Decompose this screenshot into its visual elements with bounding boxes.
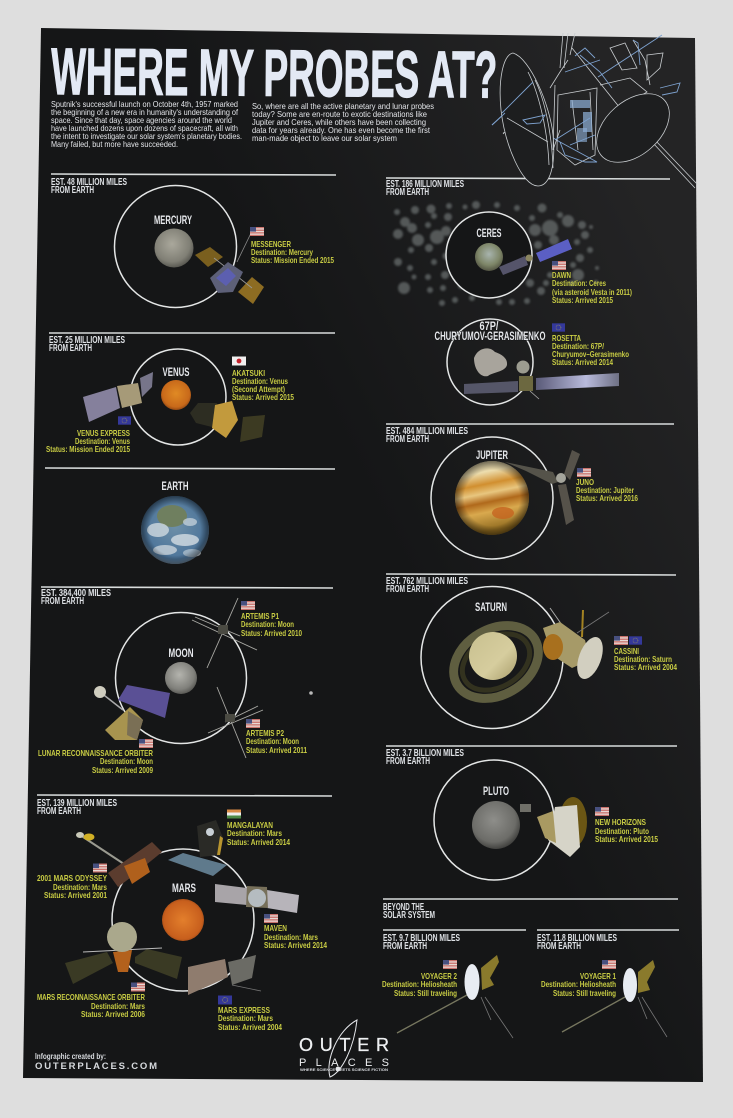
planet: Jupiter (455, 461, 529, 535)
caption: Akatsuki: Status: Arrived 2015 (232, 393, 294, 402)
caption: Mangalayan: MANGALAYAN (227, 821, 273, 830)
panel: Beyond the solar system (382, 901, 667, 1038)
panel: Jupiter (386, 425, 638, 559)
caption: Mars Reconnaissance Orbiter: Status: Arrived 2006 (81, 1010, 145, 1019)
intro text left (51, 100, 242, 149)
label: Mercury: MERCURY (154, 213, 192, 227)
panel: Pluto (386, 747, 658, 880)
caption: Akatsuki: Destination: Venus (232, 377, 288, 386)
flag: EU (118, 416, 131, 425)
caption: Messenger (251, 240, 334, 265)
heading: Mars distance: FROM EARTH (37, 805, 81, 817)
flag: EU (218, 996, 232, 1004)
caption: Akatsuki: AKATSUKI (232, 369, 265, 378)
caption: Rosetta: ROSETTA (552, 334, 581, 343)
caption: Lunar Reconnaissance Orbiter: LUNAR RECONNAISSANCE ORBITER (38, 749, 153, 758)
caption: Artemis P2: Status: Arrived 2011 (246, 746, 307, 755)
caption: Rosetta (552, 334, 629, 367)
caption: Rosetta: Destination: 67P/ (552, 342, 605, 351)
caption: Lunar Reconnaissance Orbiter (38, 749, 153, 775)
intro text right: today? Some are en-route to exotic destinations like (252, 110, 427, 119)
logo: Outer Places (299, 1020, 389, 1077)
caption: Mars Reconnaissance Orbiter: MARS RECONNAISSANCE ORBITER (37, 993, 145, 1002)
orbit ring (116, 612, 246, 744)
caption: Artemis P1: ARTEMIS P1 (241, 612, 279, 621)
asteroid field (393, 201, 599, 306)
probe: 2001 Mars Odyssey (76, 832, 162, 887)
caption: Artemis P1: Status: Arrived 2010 (241, 629, 302, 638)
label: comet name: CHURYUMOV-GERASIMENKO (434, 329, 546, 343)
heading: Jupiter distance: EST. 484 MILLION MILES (386, 425, 468, 437)
label: Pluto: PLUTO (483, 784, 509, 798)
panel: Mars (37, 797, 327, 1032)
panel: Earth (141, 479, 209, 564)
label: comet name (434, 319, 546, 343)
probe: Maven (215, 884, 299, 913)
probe: Artemis P1 (192, 598, 257, 668)
caption: Maven: Destination: Mars (264, 933, 318, 942)
probe: Messenger (195, 229, 264, 304)
flag: USA (443, 960, 457, 969)
logo: Outer Places: PLACES (299, 1057, 389, 1069)
caption: 2001 Mars Odyssey: Status: Arrived 2001 (44, 891, 107, 900)
flag: India (227, 810, 241, 818)
heading: Saturn distance: FROM EARTH (386, 583, 429, 595)
caption: New Horizons (595, 818, 658, 844)
probe: Voyager 1 (562, 960, 667, 1037)
heading: Pluto distance: FROM EARTH (386, 755, 430, 767)
section rules (37, 174, 679, 930)
probe: Rosetta (464, 360, 619, 399)
heading: Ceres distance (386, 178, 464, 198)
caption: Voyager 2: VOYAGER 2 (421, 972, 457, 981)
flag: USA (250, 227, 264, 236)
heading: Pluto distance: EST. 3.7 BILLION MILES (386, 747, 464, 759)
planet: Pluto (472, 801, 520, 849)
heading: Saturn distance: EST. 762 MILLION MILES (386, 575, 468, 587)
caption: 2001 Mars Odyssey (37, 874, 107, 900)
caption: Dawn (552, 271, 632, 305)
heading: Voyager 2 distance: EST. 9.7 BILLION MILES (383, 932, 460, 944)
panel: Ceres (386, 178, 632, 306)
heading: Voyager 1 distance: EST. 11.8 BILLION MILES (537, 932, 617, 944)
caption: Mars Reconnaissance Orbiter (37, 993, 145, 1019)
panel: Venus (46, 334, 294, 454)
caption: Voyager 1 (541, 972, 616, 998)
caption: Juno (576, 478, 638, 503)
footer credit (35, 1052, 157, 1072)
caption: New Horizons: NEW HORIZONS (595, 818, 646, 827)
caption: Voyager 2: Destination: Heliosheath (382, 980, 457, 989)
heading: Ceres distance: FROM EARTH (386, 186, 429, 198)
caption: Dawn: DAWN (552, 271, 571, 280)
label: comet name: 67P/ (480, 319, 499, 333)
probe: Akatsuki (190, 401, 265, 442)
planet: Moon (165, 662, 197, 694)
probe: Artemis P2 (208, 687, 263, 758)
orbit ring (434, 760, 554, 880)
caption: Lunar Reconnaissance Orbiter: Destination: Moon (100, 757, 153, 766)
planet: Venus (161, 380, 191, 410)
caption: Mars Express (218, 1006, 282, 1032)
intro text right: Jupiter and Ceres, while others have been collecting (252, 118, 426, 127)
caption: Venus Express (46, 429, 130, 454)
caption: Juno: Status: Arrived 2016 (576, 494, 638, 503)
flag: EU (629, 636, 642, 645)
label: Mars: MARS (172, 881, 196, 895)
heading: Voyager 2 distance (383, 932, 460, 952)
label: Moon: MOON (168, 646, 194, 660)
flag: USA (139, 739, 153, 748)
caption: Dawn: (via asteroid Vesta in 2011) (552, 288, 632, 297)
caption: Artemis P1 (241, 612, 302, 638)
footer credit: Infographic created by: (35, 1052, 106, 1061)
intro text right: data for years already. One has even become the first (252, 126, 431, 135)
heading: Ceres distance: EST. 186 MILLION MILES (386, 178, 464, 190)
heading: Venus distance: FROM EARTH (49, 342, 92, 354)
flag: EU (552, 323, 565, 332)
panel: 67P comet (434, 319, 629, 405)
caption: New Horizons: Status: Arrived 2015 (595, 835, 658, 844)
caption: Messenger: Destination: Mercury (251, 248, 313, 257)
footer credit: OUTERPLACES.COM (35, 1061, 157, 1072)
heading: Voyager 1 distance (537, 932, 617, 952)
heading: Jupiter distance (386, 425, 468, 445)
small speck (309, 691, 313, 695)
caption: Maven: Status: Arrived 2014 (264, 941, 327, 950)
flag: USA (131, 982, 145, 992)
heading: Voyager 2 distance: FROM EARTH (383, 940, 427, 952)
heading: Beyond the solar system: SOLAR SYSTEM (383, 909, 435, 921)
probe: Mars Express (188, 955, 261, 995)
heading: Voyager 1 distance: FROM EARTH (537, 940, 581, 952)
caption: Maven: MAVEN (264, 924, 287, 933)
caption: Artemis P1: Destination: Moon (241, 620, 294, 629)
intro text right: So, where are all the active planetary and lunar probes (252, 102, 434, 111)
logo: Outer Places: OUTER (299, 1035, 389, 1055)
caption: Dawn: Destination: Ceres (552, 279, 606, 288)
caption: Voyager 2 (382, 972, 457, 998)
label: Earth: EARTH (162, 479, 188, 493)
label: Venus: VENUS (162, 365, 190, 379)
heading: Venus distance (49, 334, 125, 354)
heading: Moon distance: FROM EARTH (41, 595, 84, 607)
caption: Juno: JUNO (576, 478, 594, 487)
heading: Mercury distance: EST. 48 MILLION MILES (51, 176, 127, 188)
caption: Rosetta: Status: Arrived 2014 (552, 358, 613, 367)
heading: Beyond the solar system (383, 901, 435, 921)
panel: Moon (38, 587, 313, 775)
intro text right (252, 102, 434, 143)
flag: USA (614, 636, 628, 645)
intro text left: the intent to investigate our solar system's planetary bodies. (51, 132, 242, 141)
label: Saturn: SATURN (475, 600, 507, 614)
heading: Beyond the solar system: BEYOND THE (383, 901, 424, 913)
caption: Mangalayan (227, 821, 290, 847)
caption: Messenger: MESSENGER (251, 240, 291, 249)
intro text left: Many failed, but more have succeeded. (51, 140, 178, 149)
planet: Earth (141, 496, 209, 564)
flag: USA (595, 807, 609, 816)
caption: Voyager 1: VOYAGER 1 (580, 972, 616, 981)
logo: Outer Places: WHERE SCIENCE MEETS SCIENCE FICTION (300, 1068, 389, 1072)
intro text left: Sputnik's successful launch on October 4th, 1957 marked (51, 100, 238, 109)
intro text left: space. Since that day, space agencies around the world (51, 116, 232, 125)
probe: New Horizons (520, 797, 587, 857)
spacecraft line art (492, 33, 697, 188)
caption: Mars Express: Status: Arrived 2004 (218, 1023, 282, 1032)
planet: Saturn (441, 611, 551, 713)
heading: Jupiter distance: FROM EARTH (386, 433, 429, 445)
heading: Pluto distance (386, 747, 464, 767)
caption: Messenger: Status: Mission Ended 2015 (251, 256, 334, 265)
probe: Juno (505, 450, 580, 525)
caption: Akatsuki: (Second Attempt) (232, 385, 285, 394)
orbit ring (114, 186, 236, 308)
probe: Voyager 2 (397, 955, 513, 1038)
orbit ring (421, 586, 563, 728)
caption: Cassini: Status: Arrived 2004 (614, 663, 677, 672)
caption: Venus Express: VENUS EXPRESS (77, 429, 130, 438)
caption: Juno: Destination: Jupiter (576, 486, 635, 495)
caption: Mars Express: Destination: Mars (218, 1014, 273, 1023)
flag: USA (602, 960, 616, 969)
caption: Voyager 1: Status: Still traveling (553, 989, 616, 998)
caption: 2001 Mars Odyssey: Destination: Mars (53, 883, 107, 892)
heading: Venus distance: EST. 25 MILLION MILES (49, 334, 125, 346)
heading: Moon distance (41, 587, 111, 607)
panel: Mercury (51, 176, 334, 308)
heading: Moon distance: EST. 384,400 MILES (41, 587, 111, 599)
flag: USA (577, 468, 591, 477)
label: Ceres: CERES (476, 226, 502, 240)
caption: Lunar Reconnaissance Orbiter: Status: Arrived 2009 (92, 766, 153, 775)
caption: Voyager 2: Status: Still traveling (394, 989, 457, 998)
heading: Mars distance (37, 797, 117, 817)
caption: Voyager 1: Destination: Heliosheath (541, 980, 616, 989)
probe: Lunar Reconnaissance Orbiter (94, 685, 170, 740)
heading: Saturn distance (386, 575, 468, 595)
intro text left: have launched dozens upon dozens of spacecraft, all with (51, 124, 238, 133)
caption: Artemis P2 (246, 729, 307, 755)
caption: Cassini (614, 647, 677, 672)
caption: Venus Express: Destination: Venus (75, 437, 130, 446)
label: Jupiter: JUPITER (476, 448, 508, 462)
caption: Cassini: Destination: Saturn (614, 655, 672, 664)
probe: Cassini (543, 608, 609, 682)
intro text right: man-made object to leave our solar system (252, 134, 397, 143)
caption: Akatsuki (232, 369, 294, 402)
orbit ring (447, 319, 533, 405)
orbit ring (431, 437, 553, 559)
panel: Saturn (386, 575, 677, 728)
intro text left: the beginning of a new era in humanity's understanding of (51, 108, 239, 117)
caption: Dawn: Status: Arrived 2015 (552, 296, 613, 305)
orbit ring (446, 212, 532, 298)
orbit ring (112, 849, 254, 991)
flag: USA (264, 914, 278, 923)
caption: Maven (264, 924, 327, 950)
heading: Mercury distance: FROM EARTH (51, 184, 94, 196)
caption: Artemis P2: ARTEMIS P2 (246, 729, 284, 738)
probe: Dawn (499, 239, 572, 275)
planet: Mars (162, 899, 204, 941)
caption: Mars Reconnaissance Orbiter: Destination: Mars (91, 1002, 145, 1011)
orbit ring (130, 349, 226, 445)
caption: Artemis P2: Destination: Moon (246, 737, 299, 746)
caption: 2001 Mars Odyssey: 2001 MARS ODYSSEY (37, 874, 107, 883)
flag: USA (552, 261, 566, 270)
caption: Mangalayan: Status: Arrived 2014 (227, 838, 290, 847)
flag: Japan (232, 356, 246, 366)
probe: Mars Reconnaissance Orbiter (65, 922, 182, 984)
probe: Venus Express (83, 372, 153, 422)
planet: Ceres (475, 243, 503, 271)
flag: USA (241, 601, 255, 610)
comet (474, 348, 507, 376)
caption: Venus Express: Status: Mission Ended 2015 (46, 445, 130, 454)
caption: Cassini: CASSINI (614, 647, 639, 656)
heading: Mercury distance (51, 176, 127, 196)
caption: Mars Express: MARS EXPRESS (218, 1006, 270, 1015)
caption: Rosetta: Churyumov–Gerasimenko (552, 350, 629, 359)
probe: Mangalayan (168, 820, 227, 876)
flag: USA (93, 864, 107, 872)
heading: Mars distance: EST. 139 MILLION MILES (37, 797, 117, 809)
caption: New Horizons: Destination: Pluto (595, 827, 649, 836)
flag: USA (246, 719, 260, 728)
planet: Mercury (154, 228, 194, 268)
caption: Mangalayan: Destination: Mars (227, 829, 282, 838)
